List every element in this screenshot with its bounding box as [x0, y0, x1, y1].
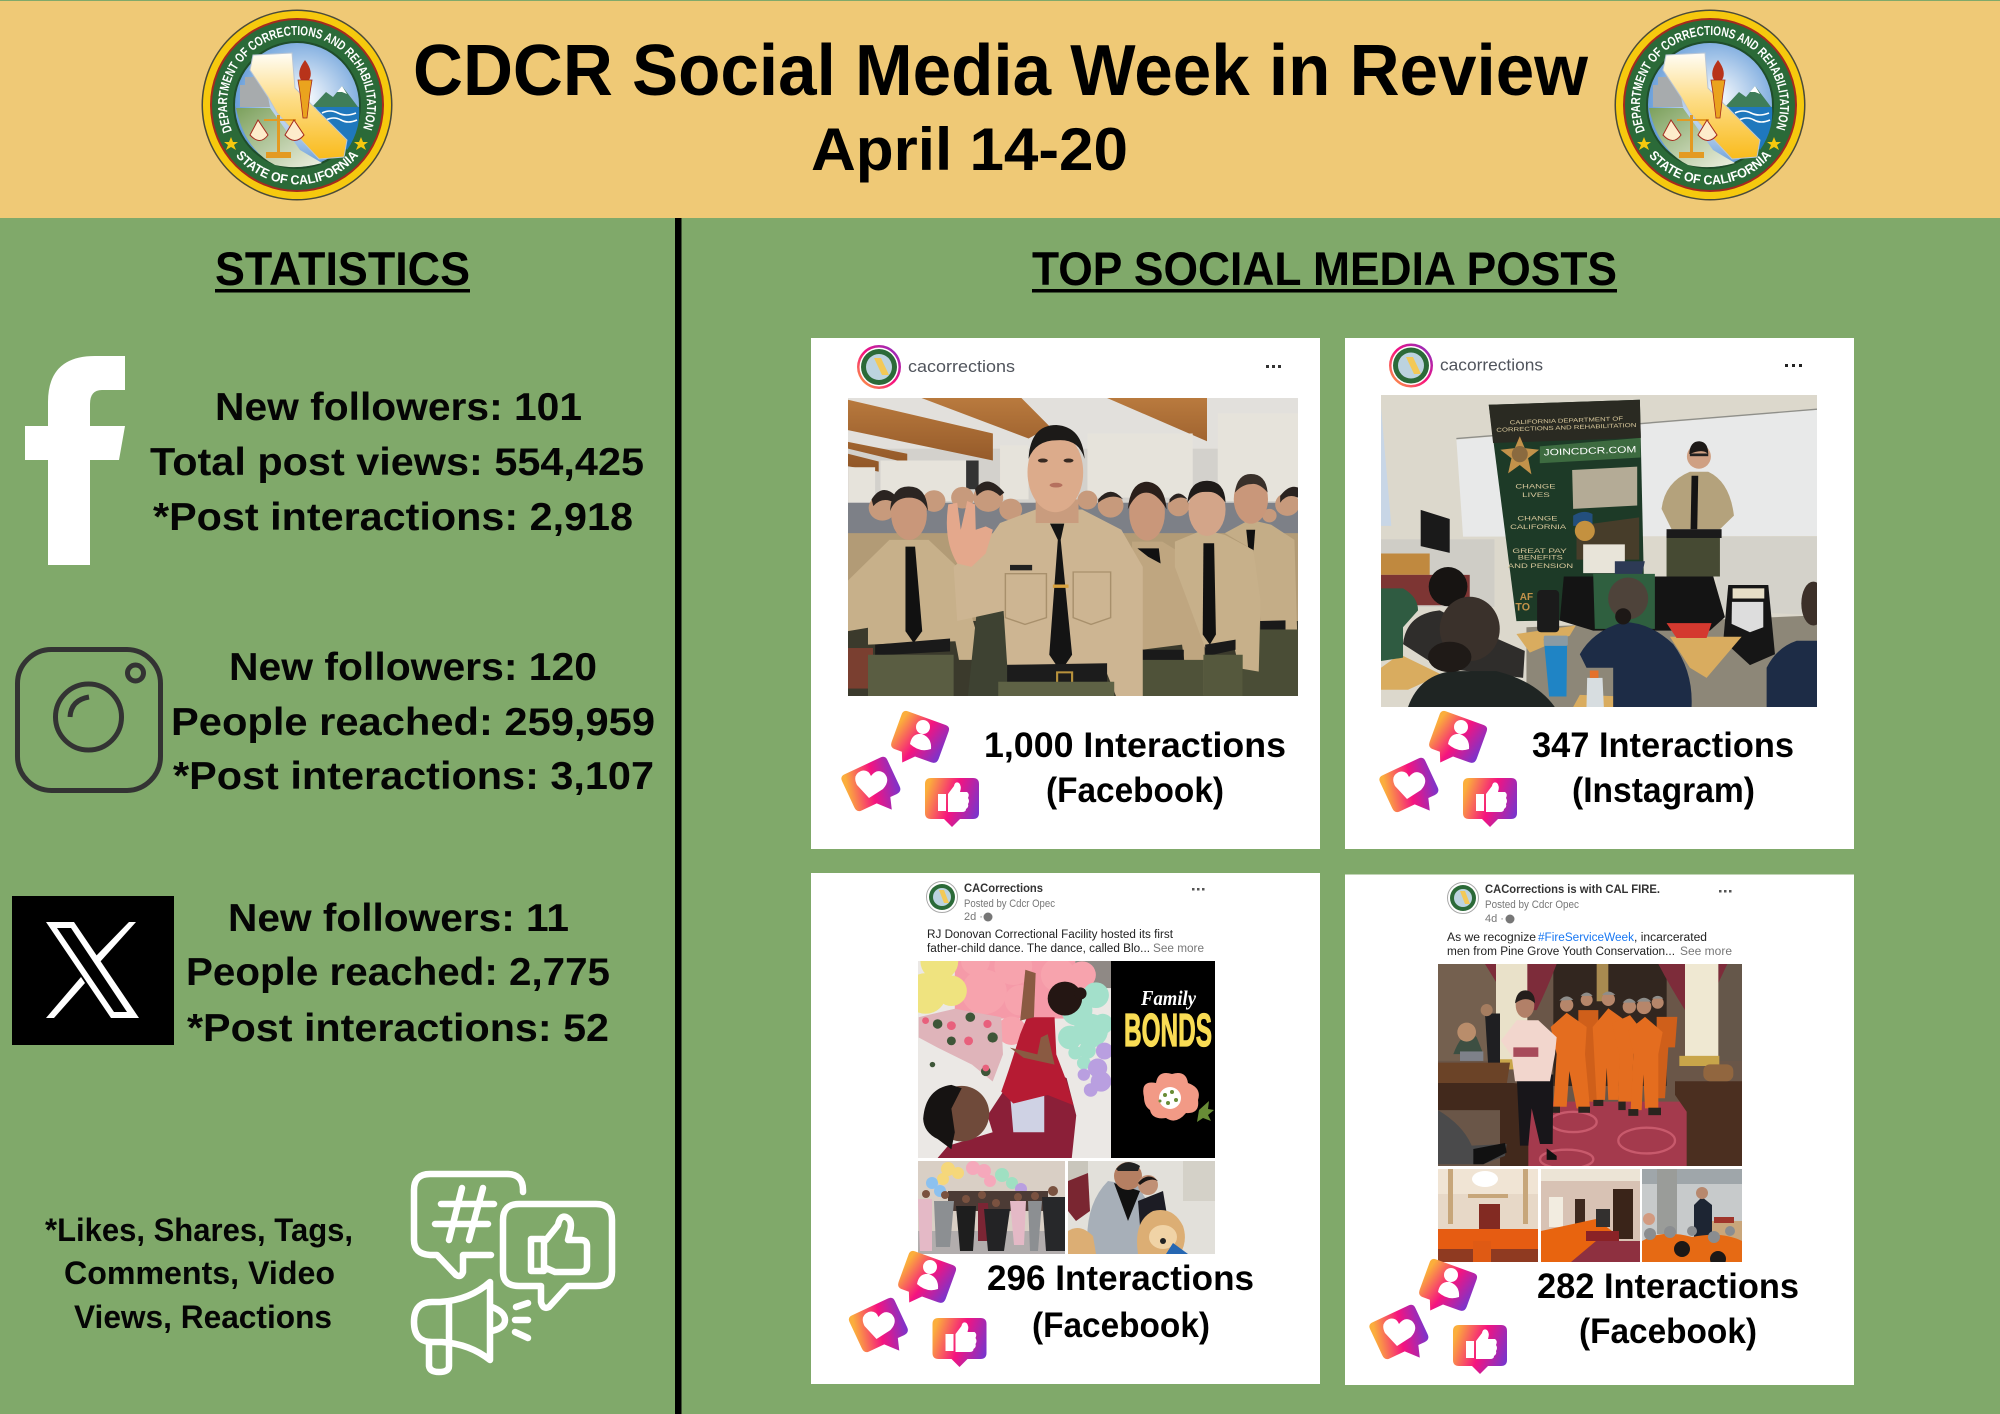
photo: crew in ornate hallway [1541, 1169, 1640, 1262]
right officer [1175, 481, 1261, 696]
photo: fire crew in senate chamber [1438, 964, 1742, 1166]
students [1381, 567, 1825, 707]
banner: CHANGE [1517, 516, 1557, 523]
icon: instagram [18, 650, 160, 790]
interaction count: 282 Interactions [1537, 1267, 1799, 1306]
left officer [848, 487, 975, 696]
reaction icons [840, 710, 979, 827]
photo: officers taking oath [848, 398, 1298, 696]
reaction icons [847, 1250, 986, 1367]
interaction count: 347 Interactions [1532, 726, 1794, 765]
facebook statistics: New followers: 101 [215, 386, 582, 429]
more menu [1266, 365, 1281, 368]
post body text [927, 929, 1204, 955]
daughter [1001, 970, 1087, 1132]
post header text: CACorrections is with CAL FIRE. [1485, 882, 1660, 896]
more menu [1192, 888, 1204, 890]
title: CDCR Social Media Week in Review [413, 31, 1589, 111]
x statistics [186, 897, 610, 1050]
instagram statistics [171, 646, 655, 798]
panel: post 3 [811, 873, 1320, 1384]
interaction count: 1,000 Interactions [984, 726, 1286, 765]
account name: cacorrections [1440, 356, 1543, 374]
banner: CALIFORNIA DEPARTMENT OF [1510, 416, 1624, 426]
interaction count: (Facebook) [1046, 771, 1224, 810]
post body text: father-child dance. The dance, called Blo... [927, 943, 1150, 955]
panel: post 1 [811, 338, 1320, 849]
heading: top social media posts: TOP SOCIAL MEDIA POSTS [1032, 242, 1617, 295]
panel graphic: family bonds: Family [1140, 986, 1197, 1010]
table [1560, 574, 1725, 631]
seal stars [1637, 137, 1781, 150]
banner: GREAT PAY [1512, 548, 1568, 555]
post body text: , incarcerated [1634, 932, 1707, 944]
interaction count [987, 1259, 1254, 1345]
post header text: 4d · [1485, 913, 1504, 925]
panel: post 4 [1345, 874, 1854, 1385]
post body text [1447, 932, 1732, 958]
x statistics: People reached: 2,775 [186, 951, 610, 994]
icon: social media outline cluster [414, 1174, 612, 1372]
seal bottom lettering: STATE OF CALIFORNIA [236, 151, 358, 184]
banner: JOINCDCR.COM [1544, 444, 1637, 458]
more menu [1785, 364, 1802, 367]
seal top lettering: DEPARTMENT OF CORRECTIONS AND REHABILITATION [218, 26, 376, 134]
photo: crew in senate gallery [1438, 1169, 1538, 1262]
x statistics: *Post interactions: 52 [187, 1007, 609, 1050]
banner: CHANGE [1515, 484, 1555, 491]
far-right officer [1225, 474, 1298, 696]
podium and monitor [1381, 510, 1470, 605]
post header text [964, 881, 1055, 923]
presenter [1662, 441, 1734, 577]
icon: facebook [25, 356, 125, 565]
interaction count [984, 726, 1286, 810]
photo: father lifting daughter [918, 961, 1111, 1158]
facebook statistics: Total post views: 554,425 [150, 441, 644, 484]
orange crew [1551, 991, 1677, 1116]
account name: cacorrections [908, 357, 1015, 376]
carpet [1517, 1102, 1693, 1169]
facebook statistics: *Post interactions: 2,918 [153, 496, 633, 539]
footnote: *Likes, Shares, Tags, [45, 1212, 353, 1248]
banner: AND PENSION [1508, 563, 1574, 570]
banner: CORRECTIONS AND REHABILITATION [1496, 423, 1637, 434]
photo: classroom recruiting presentation [1381, 395, 1817, 707]
interaction count: (Instagram) [1572, 771, 1755, 810]
interaction count [1537, 1267, 1799, 1351]
x statistics: New followers: 11 [228, 897, 569, 940]
post header text: Posted by Cdcr Opec [1485, 899, 1579, 911]
post body text: men from Pine Grove Youth Conservation... [1447, 946, 1675, 958]
seal: left [202, 10, 392, 200]
photo: father, son and golden retriever [1068, 1161, 1215, 1254]
reaction icons [1378, 710, 1517, 827]
interaction count [1532, 726, 1794, 810]
seal top lettering: DEPARTMENT OF CORRECTIONS AND REHABILITATION [1631, 26, 1790, 134]
post body text: As we recognize [1447, 932, 1536, 944]
avatar: seal [1448, 882, 1478, 914]
more menu [1719, 890, 1732, 892]
seal bottom lettering: STATE OF CALIFORNIA [1650, 151, 1772, 184]
footnote [45, 1212, 353, 1335]
interaction count: (Facebook) [1032, 1306, 1210, 1345]
header band [0, 1, 2000, 218]
post body text: See more [1680, 946, 1732, 958]
interaction count: 296 Interactions [987, 1259, 1254, 1298]
banner: AF [1520, 592, 1533, 603]
desks [1438, 1063, 1742, 1166]
seal stars [224, 137, 368, 150]
banner: TO [1515, 601, 1530, 613]
footnote: Comments, Video [64, 1255, 335, 1291]
centre officer [947, 425, 1143, 696]
photo: group portrait [918, 1161, 1065, 1254]
display board [1723, 585, 1775, 665]
panel graphic: family bonds [1111, 961, 1215, 1158]
interaction count: (Facebook) [1579, 1312, 1757, 1351]
banner [1489, 400, 1645, 621]
post body text: See more [1153, 943, 1204, 955]
avatar: instagram ring [857, 345, 901, 389]
avatar: seal [926, 882, 958, 912]
banner: LIVES [1522, 492, 1550, 499]
post body text: #FireServiceWeek [1538, 932, 1634, 944]
post body text: RJ Donovan Correctional Facility hosted its first [927, 929, 1174, 941]
icon: x logo [12, 896, 174, 1045]
date subtitle: April 14-20 [811, 116, 1128, 183]
post header text: CACorrections [964, 881, 1043, 895]
photo: speaker addressing crew [1642, 1169, 1742, 1262]
desks [1381, 626, 1742, 707]
woman officer [1128, 482, 1205, 696]
post header text: Posted by Cdcr Opec [964, 898, 1055, 910]
avatar: instagram ring [1389, 344, 1433, 388]
banner: CALIFORNIA [1510, 524, 1567, 531]
speaker [1501, 990, 1557, 1160]
seated visitor [1438, 1110, 1507, 1164]
heading: statistics: STATISTICS [215, 242, 470, 295]
father [923, 1058, 1076, 1158]
post header text [1485, 882, 1660, 925]
banner: BENEFITS [1518, 555, 1563, 562]
post header text: 2d · [964, 911, 983, 923]
seal: right [1614, 10, 1806, 200]
instagram statistics: People reached: 259,959 [171, 701, 655, 744]
bottles [1537, 590, 1712, 707]
panel graphic: family bonds: BONDS [1124, 1004, 1212, 1056]
facebook statistics [150, 386, 644, 539]
instagram statistics: New followers: 120 [229, 646, 597, 689]
instagram statistics: *Post interactions: 3,107 [173, 755, 654, 798]
footnote: Views, Reactions [74, 1299, 332, 1335]
left staff [1453, 1004, 1500, 1068]
panel: post 2 [1345, 338, 1854, 849]
reaction icons [1368, 1258, 1507, 1374]
